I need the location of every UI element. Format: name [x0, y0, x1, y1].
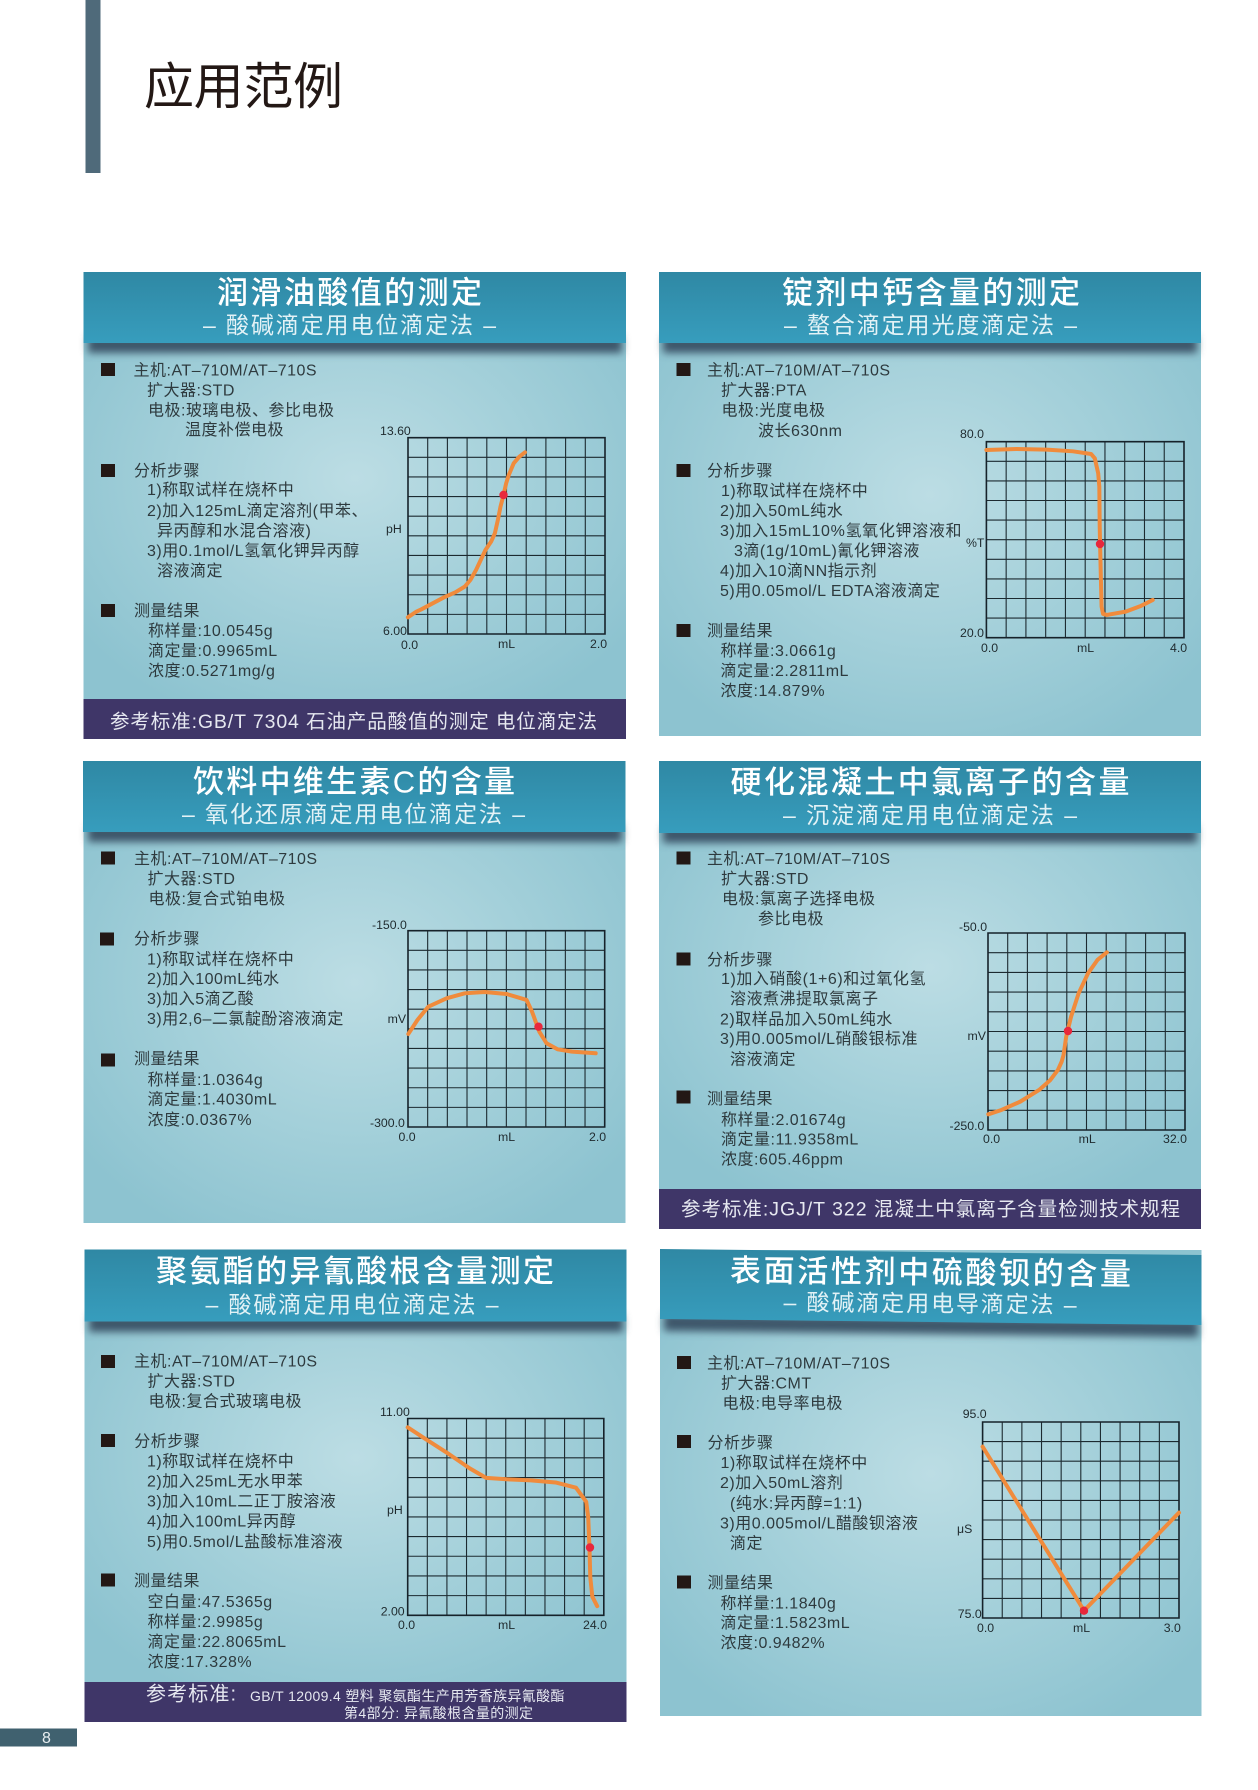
text block: specs and steps: 测量结果 [707, 622, 773, 640]
titration chart: 4.0 [1170, 641, 1187, 655]
titration chart: pH [387, 1503, 403, 1517]
panel: 锭剂中钙含量的测定 [659, 272, 1201, 736]
titration chart [380, 424, 607, 652]
text block: specs and steps: 电极:氯离子选择电极 [722, 890, 875, 908]
footer: reference standard [659, 1189, 1201, 1229]
panel: 聚氨酯的异氰酸根含量测定 [84, 1250, 626, 1722]
text block: specs and steps: 分析步骤 [134, 930, 200, 948]
text block: specs and steps: 3)用0.005mol/L醋酸钡溶液 [720, 1514, 918, 1532]
footer: reference standard: 参考标准: [146, 1682, 236, 1706]
titration chart: 80.0 [960, 427, 984, 441]
titration chart: 0.0 [981, 641, 998, 655]
text block: specs and steps: 1)称取试样在烧杯中 [720, 1454, 868, 1472]
text block: specs and steps: 电极:复合式玻璃电极 [148, 1392, 302, 1410]
text block: specs and steps: 分析步骤 [134, 1432, 200, 1450]
footer: reference standard: 第4部分: 异氰酸根含量的测定 [344, 1705, 533, 1721]
titration chart: 2.00 [381, 1604, 405, 1618]
text block: specs and steps: 浓度:0.0367% [148, 1111, 252, 1129]
text block: specs and steps: 主机:AT–710M/AT–710S [707, 1354, 891, 1372]
text block: specs and steps: 称样量:2.01674g [721, 1111, 846, 1129]
titration chart: %T [966, 536, 985, 550]
text block: specs and steps: 扩大器:CMT [721, 1374, 812, 1392]
text block: specs and steps: 3)用2,6–二氯靛酚溶液滴定 [147, 1010, 344, 1028]
text block: specs and steps: 主机:AT–710M/AT–710S [134, 362, 317, 380]
text block: specs and steps [101, 1352, 343, 1671]
titration chart [957, 1407, 1181, 1635]
text block: specs and steps: 主机:AT–710M/AT–710S [707, 850, 891, 868]
titration chart: pH [386, 522, 402, 536]
text block: specs and steps: 主机:AT–710M/AT–710S [134, 850, 318, 868]
text block: specs and steps: 分析步骤 [708, 1434, 774, 1452]
titration chart: -250.0 [950, 1119, 985, 1133]
titration chart: mV [968, 1029, 987, 1043]
titration chart: μS [957, 1522, 972, 1536]
text block: specs and steps: 浓度:17.328% [148, 1653, 252, 1671]
text block: specs and steps: 称样量:10.0545g [148, 622, 273, 640]
titration chart [950, 920, 1187, 1146]
text block: specs and steps: 溶液滴定 [730, 1050, 796, 1068]
text block: specs and steps [100, 850, 344, 1129]
text block: specs and steps: 浓度:0.9482% [720, 1634, 825, 1652]
panel header: – 酸碱滴定用电位滴定法 – [203, 312, 496, 338]
titration chart [370, 918, 606, 1144]
text block: specs and steps: 浓度:14.879% [720, 682, 825, 700]
panel header: – 氧化还原滴定用电位滴定法 – [182, 801, 525, 827]
text block: specs and steps: 1)称取试样在烧杯中 [147, 481, 294, 499]
text block: specs and steps: 称样量:1.1840g [720, 1594, 836, 1612]
titration chart: 24.0 [583, 1618, 607, 1632]
title: 应用范例 [144, 59, 343, 115]
text block: specs and steps: 3)加入10mL二正丁胺溶液 [147, 1492, 336, 1510]
titration chart: 13.60 [380, 424, 411, 438]
panel header [660, 1249, 1202, 1325]
text block: specs and steps: 波长630nm [758, 422, 842, 440]
footer: reference standard: GB/T 12009.4 塑料 聚氨酯生产用芳香族异氰酸酯 [250, 1688, 564, 1704]
titration chart: -50.0 [959, 920, 987, 934]
footer: reference standard [84, 1682, 626, 1722]
panel: 润滑油酸值的测定 [84, 272, 626, 739]
text block: specs and steps: 电极:复合式铂电极 [148, 890, 285, 908]
titration chart: mL [498, 1130, 515, 1144]
panel header [83, 761, 626, 832]
text block: specs and steps: 电极:光度电极 [722, 402, 825, 420]
text block: specs and steps: 参比电极 [758, 910, 824, 928]
text block: specs and steps: 4)加入10滴NN指示剂 [720, 562, 877, 580]
text block: specs and steps: 2)加入125mL滴定溶剂(甲苯、 [147, 502, 368, 520]
text block: specs and steps: 滴定量:0.9965mL [148, 642, 278, 660]
panel header: – 酸碱滴定用电导滴定法 – [783, 1289, 1077, 1318]
text block: specs and steps: 扩大器:STD [147, 382, 235, 400]
titration chart: mL [1077, 641, 1094, 655]
panel: 饮料中维生素C的含量 [83, 761, 626, 1223]
text block: specs and steps: 扩大器:PTA [721, 382, 807, 400]
titration chart: 11.00 [380, 1405, 410, 1419]
panel header: 表面活性剂中硫酸钡的含量 [730, 1253, 1131, 1292]
text block: specs and steps: 4)加入100mL异丙醇 [147, 1512, 296, 1530]
titration chart [380, 1405, 607, 1632]
titration chart: 0.0 [401, 638, 418, 652]
titration chart: mL [498, 637, 515, 651]
text block: specs and steps: 溶液煮沸提取氯离子 [730, 990, 879, 1008]
text block: specs and steps: 2)加入50mL溶剂 [720, 1474, 843, 1492]
titration chart: mL [498, 1618, 515, 1632]
panel: 表面活性剂中硫酸钡的含量 [660, 1249, 1202, 1716]
titration chart: -300.0 [370, 1116, 405, 1130]
titration chart: mL [1073, 1621, 1090, 1635]
text block: specs and steps: 测量结果 [134, 602, 200, 620]
text block: specs and steps: 扩大器:STD [148, 1372, 235, 1390]
text block: specs and steps: 测量结果 [707, 1090, 773, 1108]
panel header [84, 1250, 626, 1322]
text block: specs and steps: 3)用0.1mol/L氢氧化钾异丙醇 [147, 542, 360, 560]
text block: specs and steps: 滴定 [730, 1534, 763, 1552]
text block: specs and steps: 滴定量:1.5823mL [720, 1614, 850, 1632]
text block: specs and steps: 浓度:605.46ppm [721, 1150, 844, 1168]
text block: specs and steps: 测量结果 [708, 1574, 774, 1592]
text block: specs and steps: 3)用0.005mol/L硝酸银标准 [720, 1030, 918, 1048]
titration chart: -150.0 [372, 918, 407, 932]
titration chart: 2.0 [589, 1130, 606, 1144]
panel header [659, 761, 1201, 833]
panel header: 锭剂中钙含量的测定 [782, 276, 1080, 310]
text block: specs and steps: 扩大器:STD [721, 870, 809, 888]
panel header: 润滑油酸值的测定 [217, 276, 482, 310]
titration chart: 0.0 [977, 1621, 994, 1635]
text block: specs and steps: 5)用0.05mol/L EDTA溶液滴定 [720, 582, 940, 600]
text block: specs and steps: 1)称取试样在烧杯中 [147, 1452, 294, 1470]
text block: specs and steps: 1)称取试样在烧杯中 [721, 482, 868, 500]
text block: specs and steps: 浓度:0.5271mg/g [148, 662, 275, 680]
titration chart: mV [388, 1012, 407, 1026]
page number tab [0, 1728, 77, 1747]
text block: specs and steps: 滴定量:22.8065mL [148, 1633, 287, 1651]
panel header [659, 272, 1201, 343]
text block: specs and steps: 空白量:47.5365g [148, 1593, 273, 1611]
titration chart: 20.0 [960, 626, 984, 640]
footer: reference standard: 参考标准:JGJ/T 322 混凝土中氯离子含量检测技术规程 [681, 1198, 1180, 1220]
titration chart: 6.00 [383, 624, 407, 638]
text block: specs and steps: 2)取样品加入50mL纯水 [720, 1010, 893, 1028]
text block: specs and steps: 电极:玻璃电极、参比电极 [148, 402, 334, 420]
titration chart: 32.0 [1163, 1132, 1187, 1146]
panel header: 聚氨酯的异氰酸根含量测定 [156, 1254, 554, 1289]
titration chart: 0.0 [398, 1130, 416, 1144]
footer: reference standard [84, 699, 626, 739]
text block: specs and steps: 2)加入25mL无水甲苯 [147, 1472, 303, 1490]
text block: specs and steps: 2)加入50mL纯水 [720, 502, 843, 520]
text block: specs and steps [101, 362, 368, 680]
text block: specs and steps: 称样量:1.0364g [148, 1071, 263, 1089]
text block: specs and steps: 异丙醇和水混合溶液) [157, 522, 311, 540]
text block: specs and steps: 5)用0.5mol/L盐酸标准溶液 [147, 1533, 343, 1551]
text block: specs and steps: 温度补偿电极 [185, 421, 284, 439]
titration chart [960, 427, 1187, 655]
text block: specs and steps: 分析步骤 [707, 951, 773, 969]
panel: 硬化混凝土中氯离子的含量 [659, 761, 1201, 1229]
panel header: 硬化混凝土中氯离子的含量 [730, 765, 1130, 800]
text block: specs and steps: 测量结果 [134, 1572, 200, 1590]
text block: specs and steps: (纯水:异丙醇=1:1) [730, 1494, 863, 1512]
text block: specs and steps [676, 362, 962, 700]
text block: specs and steps: 2)加入100mL纯水 [147, 970, 280, 988]
titration chart: 3.0 [1164, 1621, 1181, 1635]
panel header: – 酸碱滴定用电位滴定法 – [206, 1292, 499, 1318]
text block: specs and steps: 3)加入15mL10%氢氧化钾溶液和 [720, 522, 962, 540]
text block: specs and steps: 溶液滴定 [157, 562, 223, 580]
text block: specs and steps [677, 1354, 918, 1652]
titration chart: 2.0 [590, 637, 607, 651]
panel header [84, 272, 626, 343]
text block: specs and steps: 分析步骤 [707, 462, 773, 480]
panel header: 饮料中维生素C的含量 [193, 764, 515, 800]
text block: specs and steps: 称样量:3.0661g [720, 642, 836, 660]
titration chart: 75.0 [958, 1607, 982, 1621]
text block: specs and steps: 主机:AT–710M/AT–710S [707, 362, 891, 380]
text block: specs and steps: 扩大器:STD [148, 870, 235, 888]
titration chart: mL [1079, 1132, 1096, 1146]
text block: specs and steps: 3滴(1g/10mL)氰化钾溶液 [734, 542, 920, 560]
text block: specs and steps [676, 850, 926, 1168]
text block: specs and steps: 滴定量:1.4030mL [148, 1090, 277, 1108]
text block: specs and steps: 滴定量:11.9358mL [721, 1130, 859, 1148]
text block: specs and steps: 1)称取试样在烧杯中 [147, 950, 294, 968]
text block: specs and steps: 分析步骤 [134, 462, 200, 480]
text block: specs and steps: 称样量:2.9985g [148, 1613, 263, 1631]
titration chart: 95.0 [963, 1407, 987, 1421]
titration chart: 0.0 [983, 1132, 1000, 1146]
panel header: – 螯合滴定用光度滴定法 – [784, 312, 1077, 338]
panel header: – 沉淀滴定用电位滴定法 – [783, 802, 1077, 828]
text block: specs and steps: 1)加入硝酸(1+6)和过氧化氢 [721, 970, 926, 988]
text block: specs and steps: 主机:AT–710M/AT–710S [134, 1352, 318, 1370]
text block: specs and steps: 滴定量:2.2811mL [720, 662, 849, 680]
text block: specs and steps: 电极:电导率电极 [722, 1394, 843, 1412]
accent bar [86, 0, 100, 173]
text block: specs and steps: 3)加入5滴乙酸 [147, 990, 254, 1008]
text block: specs and steps: 测量结果 [134, 1050, 200, 1068]
page number tab: 8 [42, 1730, 51, 1747]
titration chart: 0.0 [398, 1618, 415, 1632]
footer: reference standard: 参考标准:GB/T 7304 石油产品酸值的测定 电位滴定法 [110, 711, 597, 733]
